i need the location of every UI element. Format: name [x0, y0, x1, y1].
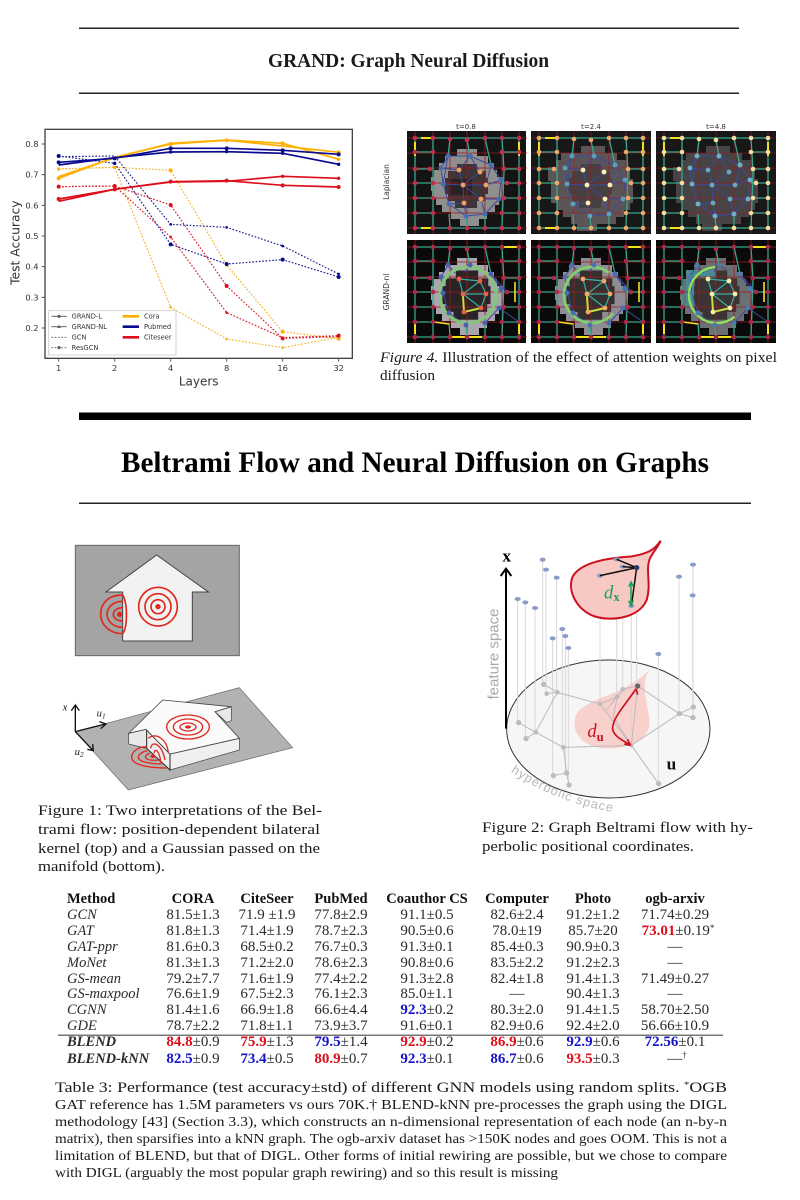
projection lines	[518, 559, 693, 785]
row CGNN: 58.70±2.50	[641, 1002, 709, 1018]
line chart: test accuracy vs layers: Test Accuracy	[8, 200, 22, 286]
row GCN: 81.5±1.3	[166, 907, 220, 923]
figure 1 caption: manifold (bottom).	[38, 859, 165, 875]
figure 1 top: house with kernels	[75, 545, 239, 656]
row GDE: 91.6±0.1	[400, 1018, 454, 1034]
table header: CORA	[172, 891, 215, 907]
label d_u: d	[587, 721, 597, 742]
line chart: test accuracy vs layers	[8, 129, 352, 388]
chart legend: GRAND-NL	[72, 323, 107, 331]
row GCN: GCN	[67, 907, 98, 923]
row CGNN: 80.3±2.0	[490, 1002, 544, 1018]
row label Laplacian: Laplacian	[382, 164, 391, 200]
row BLEND-kNN: 92.3±0.1	[400, 1051, 454, 1067]
row BLEND-kNN: 73.4±0.5	[240, 1051, 294, 1067]
row label GRAND-nl: GRAND-nl	[382, 274, 391, 310]
top rule	[79, 28, 739, 29]
row BLEND-kNN	[66, 1050, 687, 1067]
table header: Coauthor CS	[386, 891, 468, 907]
line chart: test accuracy vs layers: 0.4	[25, 262, 39, 272]
figure 4 caption: diffusion	[380, 368, 435, 384]
chart legend: Pubmed	[144, 323, 171, 331]
row BLEND: 86.9±0.6	[490, 1034, 544, 1050]
table 3 caption: with DIGL (arguably the most popular graph rewiring) and so this result is missing	[55, 1166, 558, 1181]
row GS-mean: 79.2±7.7	[166, 971, 220, 987]
row GDE: 82.9±0.6	[490, 1018, 544, 1034]
row MoNet: MoNet	[66, 955, 107, 971]
row GAT-ppr: 76.7±0.3	[314, 939, 368, 955]
figure 1 bottom: house on manifold: 1	[102, 712, 106, 721]
row MoNet: 81.3±1.3	[166, 955, 220, 971]
title: Beltrami: Beltrami Flow and Neural Diffusion on Graphs	[121, 446, 709, 479]
row MoNet: 83.5±2.2	[490, 955, 544, 971]
line chart: test accuracy vs layers: 16	[277, 363, 288, 373]
row CGNN: 92.3±0.2	[400, 1002, 454, 1018]
row MoNet: 78.6±2.3	[314, 955, 368, 971]
row GS-maxpool: —	[666, 986, 684, 1002]
row GDE: 56.66±10.9	[641, 1018, 709, 1034]
row BLEND: 72.56±0.1	[645, 1034, 705, 1050]
row GS-maxpool: 76.1±2.3	[314, 986, 368, 1002]
row BLEND: 75.9±1.3	[240, 1034, 294, 1050]
row CGNN: 66.9±1.8	[240, 1002, 294, 1018]
row GCN: 82.6±2.4	[490, 907, 544, 923]
table 3 caption: GAT reference has 1.5M parameters vs ours 70K.† BLEND-kNN pre-processes the graph using the DIGL	[55, 1098, 727, 1113]
label d_x: d	[604, 582, 613, 603]
line chart: test accuracy vs layers: 4	[168, 363, 173, 373]
row GAT-ppr: —	[666, 939, 684, 955]
row GDE: 92.4±2.0	[566, 1018, 620, 1034]
feature points	[515, 557, 696, 656]
row GAT-ppr: 91.3±0.1	[400, 939, 454, 955]
table 3 caption: Table 3: Performance (test accuracy±std) of different GNN models using random splits.	[55, 1080, 581, 1096]
row GDE	[67, 1018, 709, 1034]
row BLEND-kNN: 80.9±0.7	[314, 1051, 368, 1067]
row GCN: 77.8±2.9	[314, 907, 368, 923]
row BLEND: 84.8±0.9	[166, 1034, 220, 1050]
row GS-mean: 82.4±1.8	[490, 971, 544, 987]
row MoNet: 71.2±2.0	[240, 955, 294, 971]
row GAT-ppr: 85.4±0.3	[490, 939, 544, 955]
line chart: test accuracy vs layers: 1	[56, 363, 61, 373]
line chart: test accuracy vs layers: 0.2	[25, 323, 39, 333]
figure 1 bottom: house on manifold: 2	[80, 750, 84, 759]
row GS-maxpool: 67.5±2.3	[240, 986, 294, 1002]
figure 1 bottom: house on manifold: x	[62, 703, 68, 714]
row GAT-ppr: 68.5±0.2	[240, 939, 294, 955]
row GAT-ppr	[67, 939, 684, 955]
chart legend	[49, 311, 176, 355]
row GDE: 73.9±3.7	[314, 1018, 368, 1034]
row GS-mean: 91.4±1.3	[566, 971, 620, 987]
row CGNN: 81.4±1.6	[166, 1002, 220, 1018]
row GDE: GDE	[67, 1018, 97, 1034]
row BLEND: 92.9±0.2	[400, 1034, 454, 1050]
row BLEND-kNN: †	[682, 1050, 687, 1060]
section rule	[79, 502, 751, 504]
figure 1 bottom: house on manifold: u	[97, 709, 102, 720]
row BLEND	[66, 1034, 705, 1050]
row GS-maxpool: 90.4±1.3	[566, 986, 620, 1002]
hyperbolic disc	[507, 660, 710, 798]
row BLEND-kNN: 82.5±0.9	[166, 1051, 220, 1067]
figure 1 caption: kernel (top) and a Gaussian passed on the	[38, 841, 320, 857]
red geodesic arrow	[613, 689, 638, 745]
thick section divider	[79, 412, 751, 420]
row MoNet	[66, 955, 684, 971]
graph edges	[519, 684, 693, 785]
table 3 caption: limitation of BLEND, but that of DIGL. Other forms of initial rewiring are possible, but we chose to compare	[55, 1149, 727, 1164]
table header: ogb-arxiv	[645, 891, 706, 907]
row BLEND: 92.9±0.6	[566, 1034, 620, 1050]
title underline	[79, 92, 739, 94]
line chart: test accuracy vs layers: 8	[224, 363, 229, 373]
row GS-mean: 71.49±0.27	[641, 971, 710, 987]
table separator	[58, 1034, 723, 1036]
table header	[67, 891, 706, 907]
row GS-maxpool	[67, 986, 684, 1002]
figure 2: graph Beltrami flow	[486, 540, 710, 812]
row GAT: 78.0±19	[492, 923, 542, 939]
row GAT: 73.01±0.19	[642, 923, 710, 939]
figure 2 caption: Figure 2: Graph Beltrami flow with hy-	[482, 820, 753, 836]
line chart: test accuracy vs layers: 0.7	[25, 170, 39, 180]
row GAT: 71.4±1.9	[240, 923, 294, 939]
row GCN: 71.74±0.29	[641, 907, 709, 923]
label d_x: x	[613, 590, 620, 604]
row MoNet: 91.2±2.3	[566, 955, 620, 971]
panel: GRAND-nl t=4.8	[656, 240, 776, 343]
panel: Laplacian t=0.8	[407, 131, 527, 234]
table 3 caption: *	[684, 1080, 690, 1090]
row MoNet: —	[666, 955, 684, 971]
figure 2 caption	[482, 820, 753, 855]
row BLEND: 79.5±1.4	[314, 1034, 368, 1050]
row GDE: 71.8±1.1	[240, 1018, 294, 1034]
row MoNet: 90.8±0.6	[400, 955, 454, 971]
row GS-maxpool: GS-maxpool	[67, 986, 140, 1002]
row BLEND-kNN: 86.7±0.6	[490, 1051, 544, 1067]
figure 1 caption	[38, 803, 322, 875]
line chart: test accuracy vs layers: 0.8	[25, 139, 39, 149]
row GCN: 71.9 ±1.9	[239, 907, 295, 923]
row BLEND: BLEND	[66, 1034, 117, 1050]
panel: GRAND-nl t=0.8	[407, 240, 527, 343]
row GS-maxpool: —	[508, 986, 526, 1002]
label feature space: feature space	[486, 609, 503, 699]
row CGNN: 91.4±1.5	[566, 1002, 620, 1018]
label hyperbolic space: hyperbolic space	[512, 764, 612, 812]
row GS-mean	[67, 971, 710, 987]
table header: Computer	[485, 891, 549, 907]
row GAT: GAT	[67, 923, 95, 939]
row GAT-ppr: 90.9±0.3	[566, 939, 620, 955]
chart legend: GRAND-L	[72, 313, 102, 321]
row GS-maxpool: 85.0±1.1	[400, 986, 454, 1002]
row CGNN: CGNN	[67, 1002, 108, 1018]
table 3 caption	[55, 1080, 728, 1181]
chart legend: Citeseer	[144, 334, 172, 342]
figure 1 bottom: house on manifold	[62, 688, 293, 790]
line chart: test accuracy vs layers: 2	[112, 363, 117, 373]
column label t=2.4: t=2.4	[581, 123, 601, 131]
panel: Laplacian t=4.8	[656, 131, 776, 234]
table 3 caption: methodology [43] (Section 3.3), which constructs an n-dimensional representation of each node (an n-by-n	[55, 1115, 727, 1130]
row GDE: 78.7±2.2	[166, 1018, 220, 1034]
title: GRAND: GRAND: Graph Neural Diffusion	[268, 51, 549, 72]
row GAT: 85.7±20	[568, 923, 618, 939]
table 3 caption: OGB	[689, 1080, 727, 1096]
row GAT: 81.8±1.3	[166, 923, 220, 939]
figure 1 caption: trami flow: position-dependent bilateral	[38, 822, 320, 838]
row GAT-ppr: GAT-ppr	[67, 939, 118, 955]
figure 4 caption	[379, 350, 777, 384]
row CGNN	[67, 1002, 709, 1018]
black edges in feature space	[600, 559, 637, 606]
chart legend: Cora	[144, 313, 160, 321]
results table	[58, 891, 723, 1067]
row CGNN: 66.6±4.4	[314, 1002, 368, 1018]
geodesic ball	[574, 669, 650, 748]
line chart: test accuracy vs layers: 32	[333, 363, 344, 373]
table header: Method	[67, 891, 115, 907]
green distance arrow	[629, 582, 633, 605]
figure 2 caption: perbolic positional coordinates.	[482, 839, 694, 855]
row GAT: 90.5±0.6	[400, 923, 454, 939]
row GS-maxpool: 76.6±1.9	[166, 986, 220, 1002]
label x: x	[502, 547, 511, 566]
chart legend: ResGCN	[72, 344, 98, 352]
chart legend: GCN	[72, 334, 86, 342]
label d_u: u	[597, 730, 604, 744]
panel: Laplacian t=2.4	[531, 131, 651, 234]
figure 1 caption: Figure 1: Two interpretations of the Bel-	[38, 803, 322, 819]
table header: PubMed	[314, 891, 368, 907]
feature space blob	[571, 541, 661, 619]
row GCN: 91.1±0.5	[400, 907, 454, 923]
row GAT: *	[710, 923, 715, 933]
row GCN: 91.2±1.2	[566, 907, 620, 923]
row BLEND-kNN: 93.5±0.3	[566, 1051, 620, 1067]
row GS-mean: 77.4±2.2	[314, 971, 368, 987]
row BLEND-kNN: BLEND-kNN	[66, 1051, 150, 1067]
row GS-mean: 71.6±1.9	[240, 971, 294, 987]
pixel diffusion figure	[382, 123, 776, 343]
figure 1 bottom: house on manifold: u	[75, 747, 80, 758]
line chart: test accuracy vs layers: Layers	[179, 374, 219, 388]
line chart: test accuracy vs layers: 0.6	[25, 200, 39, 210]
row BLEND-kNN: —	[667, 1051, 682, 1067]
table header: Photo	[575, 891, 611, 907]
column label t=0.8: t=0.8	[456, 123, 476, 131]
panel: GRAND-nl t=2.4	[531, 240, 651, 343]
row GS-mean: 91.3±2.8	[400, 971, 454, 987]
table 3 caption: matrix), then sparsifies into a kNN graph. The ogb-arxiv dataset has >150K nodes and goes OOM. This is not a	[55, 1132, 728, 1147]
column label t=4.8: t=4.8	[706, 123, 726, 131]
line chart: test accuracy vs layers: 0.5	[25, 231, 39, 241]
line chart: test accuracy vs layers: 0.3	[25, 292, 39, 302]
row GAT	[67, 923, 715, 939]
row GAT-ppr: 81.6±0.3	[166, 939, 220, 955]
row GCN	[67, 907, 709, 923]
row GS-mean: GS-mean	[67, 971, 121, 987]
table header: CiteSeer	[240, 891, 294, 907]
figure 4 caption: Figure 4. Illustration of the effect of attention weights on pixel	[379, 350, 777, 366]
feature axis arrow	[501, 569, 511, 729]
row GAT: 78.7±2.3	[314, 923, 368, 939]
label u: u	[667, 755, 677, 774]
